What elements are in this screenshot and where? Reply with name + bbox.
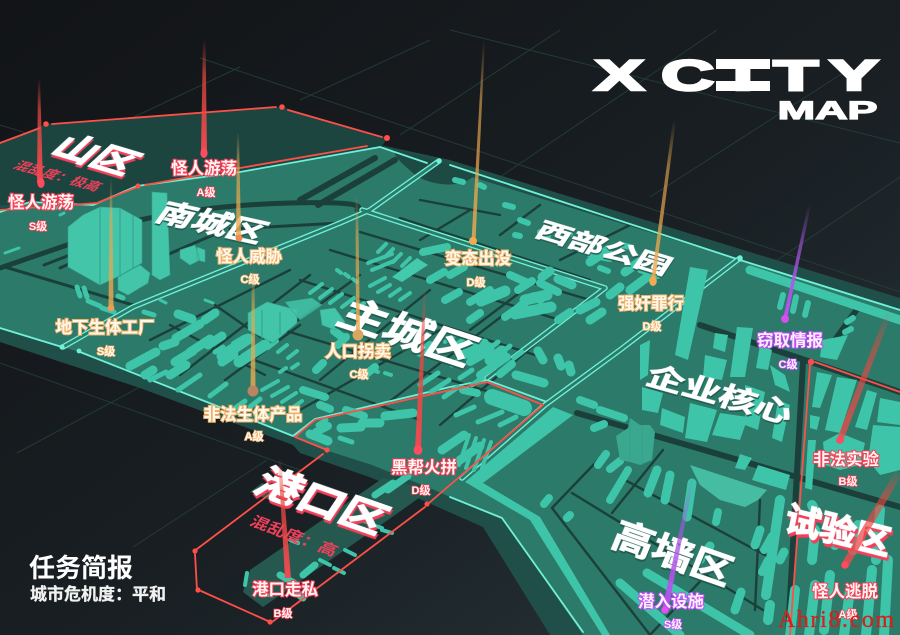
land rim [0,146,900,635]
marker: 窃取情报 C [757,205,824,371]
district label: 山区: 山区 [43,131,148,181]
marker: 怪人游荡 A [171,40,237,199]
district label: 主城区: 主城区 [329,293,486,374]
marker: 怪人威胁 C: 怪人威胁 [216,246,282,266]
red zone: harbour border [195,382,543,622]
tower clusters [68,192,655,465]
title: X CITY: X [595,51,644,99]
marker: 港口走私 B: B级 [274,606,292,620]
park dark patches [393,148,475,184]
marker: 黑帮火拼 D [391,285,457,497]
marker: 黑帮火拼 D: 黑帮火拼 [391,458,457,477]
title: X CITY: T [774,51,818,99]
red zone nodes: harbour [192,447,430,625]
marker: 潜入设施 S: S级 [664,617,682,631]
district label: 企业核心: 企业核心 [642,360,798,429]
marker: 变态出没 D: 变态出没 [445,248,512,268]
title: X CITY [595,51,878,99]
red zone nodes: mountain [43,104,390,189]
marker: 强奸罪行 D: 强奸罪行 [618,294,684,313]
marker: 人口拐卖 C [325,195,391,381]
cyan main roads [0,147,900,632]
marker: 窃取情报 C: 窃取情报 [757,331,824,350]
marker: 怪人游荡 S: 怪人游荡 [8,192,74,212]
marker: 地下生体工厂 S: S级 [97,344,115,358]
marker: 人口拐卖 C: C级 [350,367,368,381]
district sublabel: chaos very high: 混乱度：极高 [9,158,107,194]
red zone node: experiment [808,359,814,365]
city crisis level: 城市危机度：平和 [30,584,166,604]
marker: 怪人逃脱 A [812,468,900,621]
title: X CITY: Y [830,51,878,99]
marker: 怪人游荡 S: S级 [29,219,47,233]
low-rise buildings [5,180,888,635]
district label: 试验区: 试验区 [782,500,894,563]
harbour strip land [243,478,430,607]
district label: 南城区: 南城区 [149,198,274,249]
marker: 潜入设施 S: 潜入设施 [638,592,704,611]
marker: 非法实验 B [813,310,892,488]
marker: 非法生体产品 A: A级 [245,429,263,443]
marker: 港口走私 B: 港口走私 [252,580,318,599]
marker: 怪人游荡 A: A级 [197,185,215,199]
wide teal avenue [465,407,610,635]
marker: 人口拐卖 C: 人口拐卖 [325,342,391,361]
marker: 强奸罪行 D: D级 [643,319,661,333]
district label: 港口区: 港口区 [247,462,396,541]
marker: 强奸罪行 D [618,120,684,333]
marker: 怪人逃脱 A: A级 [839,607,857,621]
marker: 怪人逃脱 A: 怪人逃脱 [812,582,878,601]
marker: 港口走私 B [252,458,318,620]
red zone: experiment border [790,362,900,635]
mission briefing heading: 任务简报 [29,553,133,583]
marker: 变态出没 D [445,40,512,289]
title: X CITY: I [733,51,753,99]
marker: 非法生体产品 A [204,268,302,443]
park blob [690,465,767,507]
district label: 西部公园: 西部公园 [530,218,677,280]
marker: 非法实验 B: 非法实验 [813,449,880,469]
land main surface [0,147,900,635]
subtitle: MAP: MAP [778,96,878,124]
mid-rise block polygons [392,258,900,490]
marker: 地下生体工厂 S: 地下生体工厂 [56,318,154,337]
lower tower outlines [100,207,642,465]
district label: 高墙区: 高墙区 [606,515,739,593]
marker: 怪人威胁 C [216,132,282,286]
marker: 非法生体产品 A: 非法生体产品 [204,405,302,424]
marker: 怪人游荡 A: 怪人游荡 [171,158,237,178]
title: X CITY: C [661,51,714,99]
marker: 黑帮火拼 D: D级 [412,483,430,497]
district sublabel: chaos high: 混乱度：高 [247,512,342,560]
marker: 变态出没 D: D级 [467,275,485,289]
marker: 窃取情报 C: C级 [779,357,797,371]
watermark: Ahri8.com [778,607,894,633]
mountain district ground [0,107,387,212]
marker: 怪人游荡 S [8,78,74,233]
marker: 非法实验 B: B级 [839,474,857,488]
marker: 怪人威胁 C: C级 [241,272,259,286]
red zone: mountain border [0,107,382,210]
marker: 地下生体工厂 S [56,178,154,358]
city roads [0,158,900,635]
road junction nodes [59,158,743,353]
marker: 潜入设施 S [638,478,704,631]
